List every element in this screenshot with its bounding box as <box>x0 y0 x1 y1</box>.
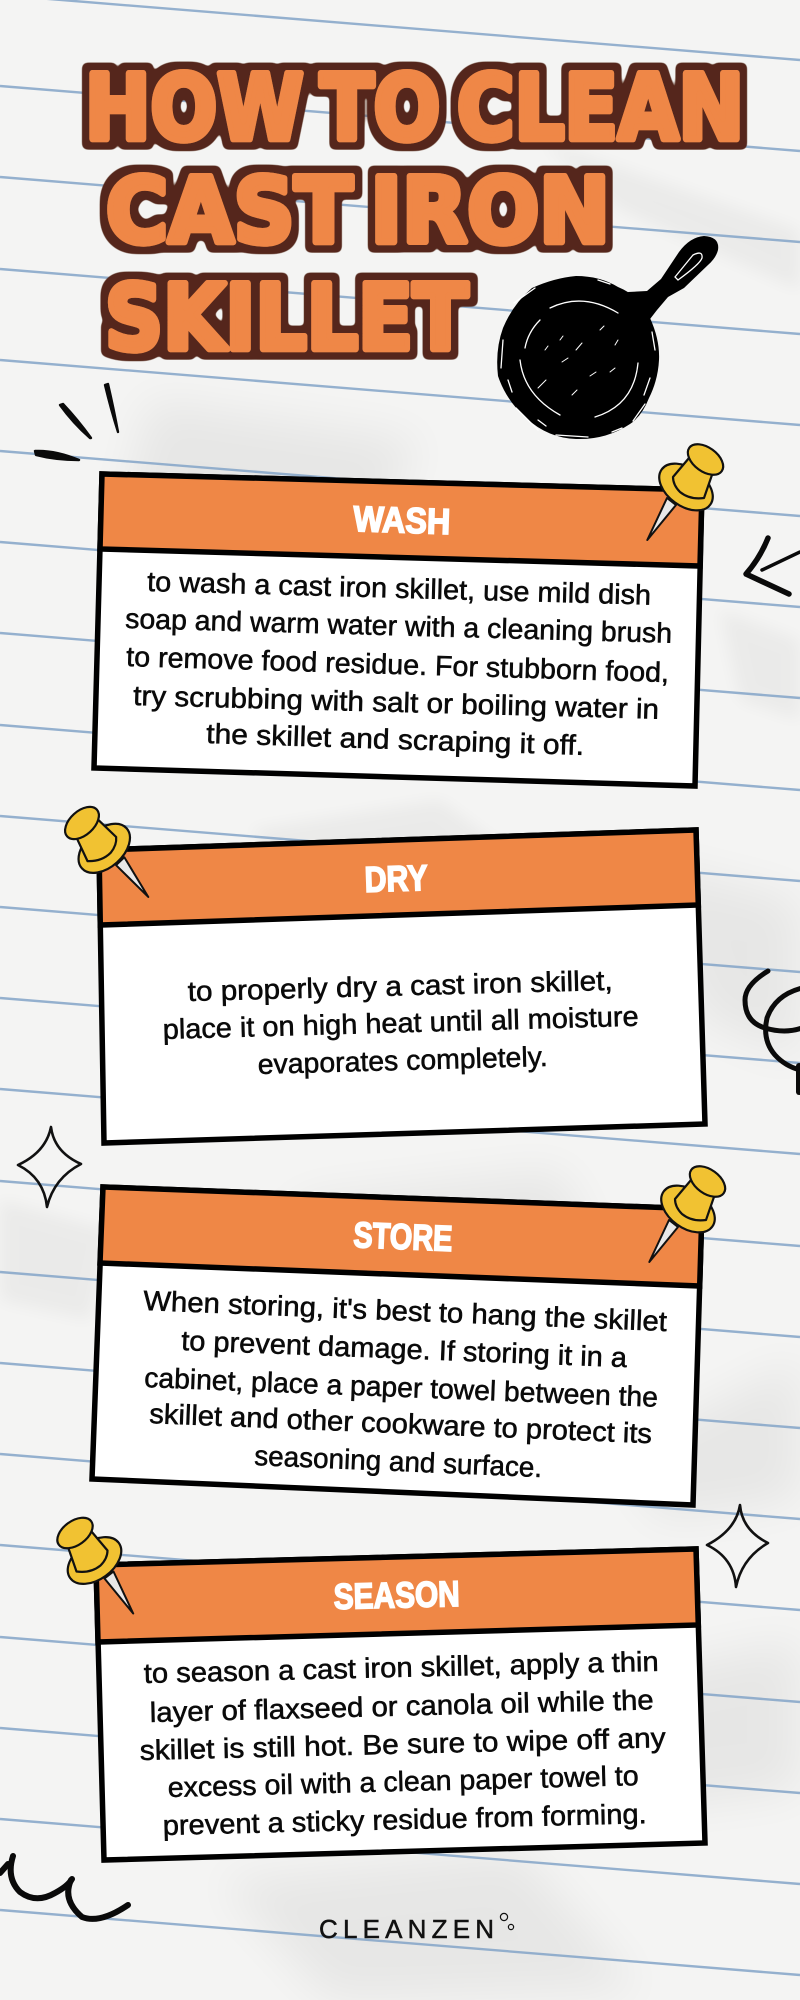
decoration: star right <box>707 1505 768 1587</box>
wash text: to remove food residue. For stubborn food, <box>126 641 670 688</box>
title: SKILLET <box>105 266 468 371</box>
icon: cast iron skillet <box>497 236 718 439</box>
store header band <box>100 1187 702 1286</box>
store heading: STORE <box>353 1214 453 1259</box>
decoration: arrow <box>746 538 800 594</box>
dry text <box>162 965 639 1080</box>
store text: cabinet, place a paper towel between the <box>144 1362 659 1413</box>
wash heading: WASH <box>353 498 451 542</box>
wash text: try scrubbing with salt or boiling water in <box>133 680 659 725</box>
season text: skillet is still hot. Be sure to wipe off any <box>139 1722 666 1766</box>
season header band <box>96 1549 698 1642</box>
season heading: SEASON <box>333 1573 460 1617</box>
panel: dry <box>57 796 705 1143</box>
wash text: soap and warm water with a cleaning brush <box>125 603 672 649</box>
season text: layer of flaxseed or canola oil while the <box>149 1684 654 1728</box>
logo: Cleanzen: CLEANZEN <box>319 1914 494 1944</box>
wash text <box>125 566 672 761</box>
store text: When storing, it's best to hang the skillet <box>143 1285 668 1337</box>
decoration: star left <box>18 1127 81 1207</box>
panel: store <box>92 1160 731 1505</box>
title <box>85 56 744 371</box>
store text <box>143 1285 668 1483</box>
wash header band <box>100 474 702 566</box>
panel: wash <box>94 438 729 786</box>
dry text: evaporates completely. <box>257 1041 548 1080</box>
dry text: to properly dry a cast iron skillet, <box>187 965 613 1007</box>
season text: prevent a sticky residue from forming. <box>162 1798 647 1841</box>
dry heading: DRY <box>364 857 428 900</box>
icon: season pin <box>52 1512 133 1614</box>
decoration: spark lines <box>35 384 118 460</box>
dry text: place it on high heat until all moisture <box>162 1001 639 1045</box>
dry header band <box>99 830 698 925</box>
icon: dry pin <box>57 796 148 905</box>
season text: excess oil with a clean paper towel to <box>167 1760 639 1803</box>
season text: to season a cast iron skillet, apply a thin <box>143 1646 659 1689</box>
store text: seasoning and surface. <box>254 1440 543 1483</box>
icon: wash pin <box>647 438 729 540</box>
panel: season <box>52 1512 705 1860</box>
wash text: the skillet and scraping it off. <box>206 718 585 761</box>
wash text: to wash a cast iron skillet, use mild dish <box>147 566 651 611</box>
season text <box>139 1646 666 1841</box>
icon: store pin <box>649 1160 731 1262</box>
decoration: squiggle <box>0 1856 128 1919</box>
store text: to prevent damage. If storing it in a <box>181 1325 628 1373</box>
title: CAST IRON <box>106 159 610 264</box>
store text: skillet and other cookware to protect its <box>149 1398 653 1449</box>
decoration: swirl <box>745 971 800 1092</box>
